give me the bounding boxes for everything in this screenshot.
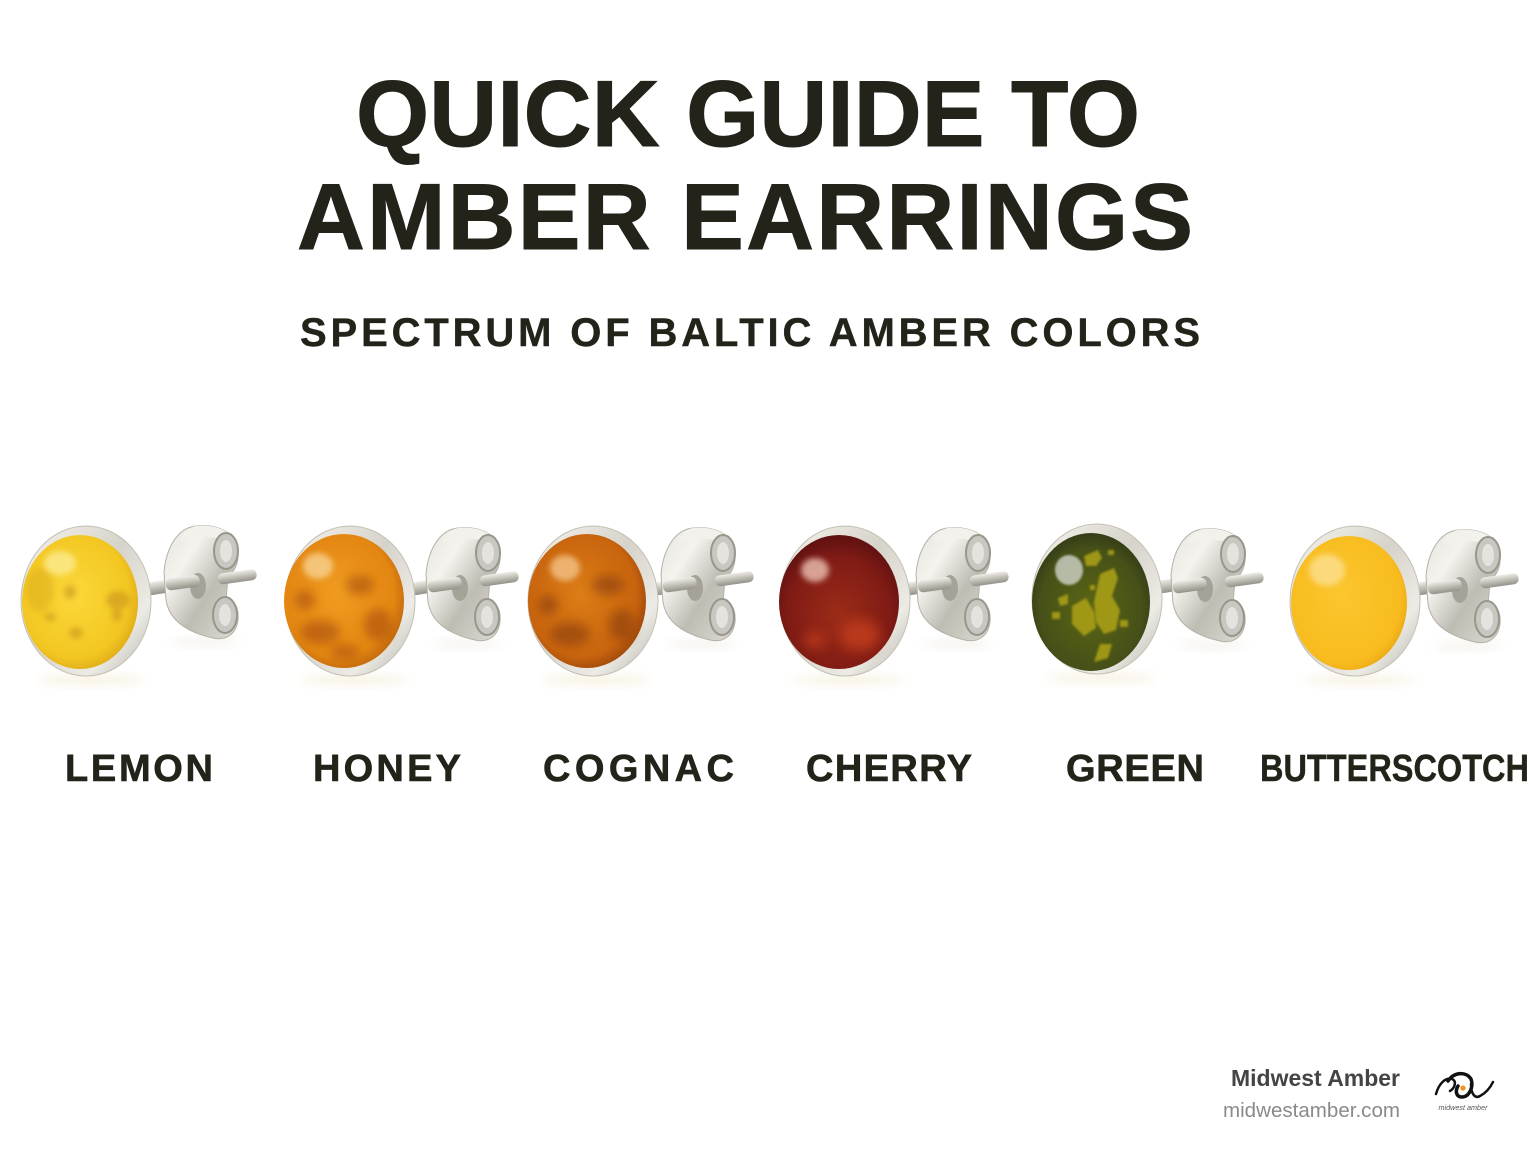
earring: lemon <box>21 526 257 685</box>
title: AMBER EARRINGS <box>297 164 1193 269</box>
label: cherry: CHERRY <box>806 748 972 790</box>
earring: cognac <box>528 526 754 685</box>
earring: cherry <box>779 526 1009 685</box>
title <box>297 61 1193 269</box>
label: green: GREEN <box>1066 748 1204 790</box>
earring: honey <box>284 526 519 685</box>
label: lemon: LEMON <box>65 748 213 790</box>
labels <box>65 748 1529 790</box>
title: QUICK GUIDE TO <box>356 61 1140 166</box>
website: midwestamber.com <box>1223 1100 1400 1122</box>
label: cognac: COGNAC <box>543 748 734 790</box>
subtitle: SPECTRUM OF BALTIC AMBER COLORS <box>300 311 1200 355</box>
icon: midwest amber logo <box>1436 1074 1493 1112</box>
label: honey: HONEY <box>313 748 461 790</box>
earring: butterscotch <box>1290 526 1519 685</box>
brand name: Midwest Amber <box>1231 1065 1400 1091</box>
earring: green <box>1032 524 1264 683</box>
icon: midwest amber logo: midwest amber <box>1438 1105 1488 1112</box>
